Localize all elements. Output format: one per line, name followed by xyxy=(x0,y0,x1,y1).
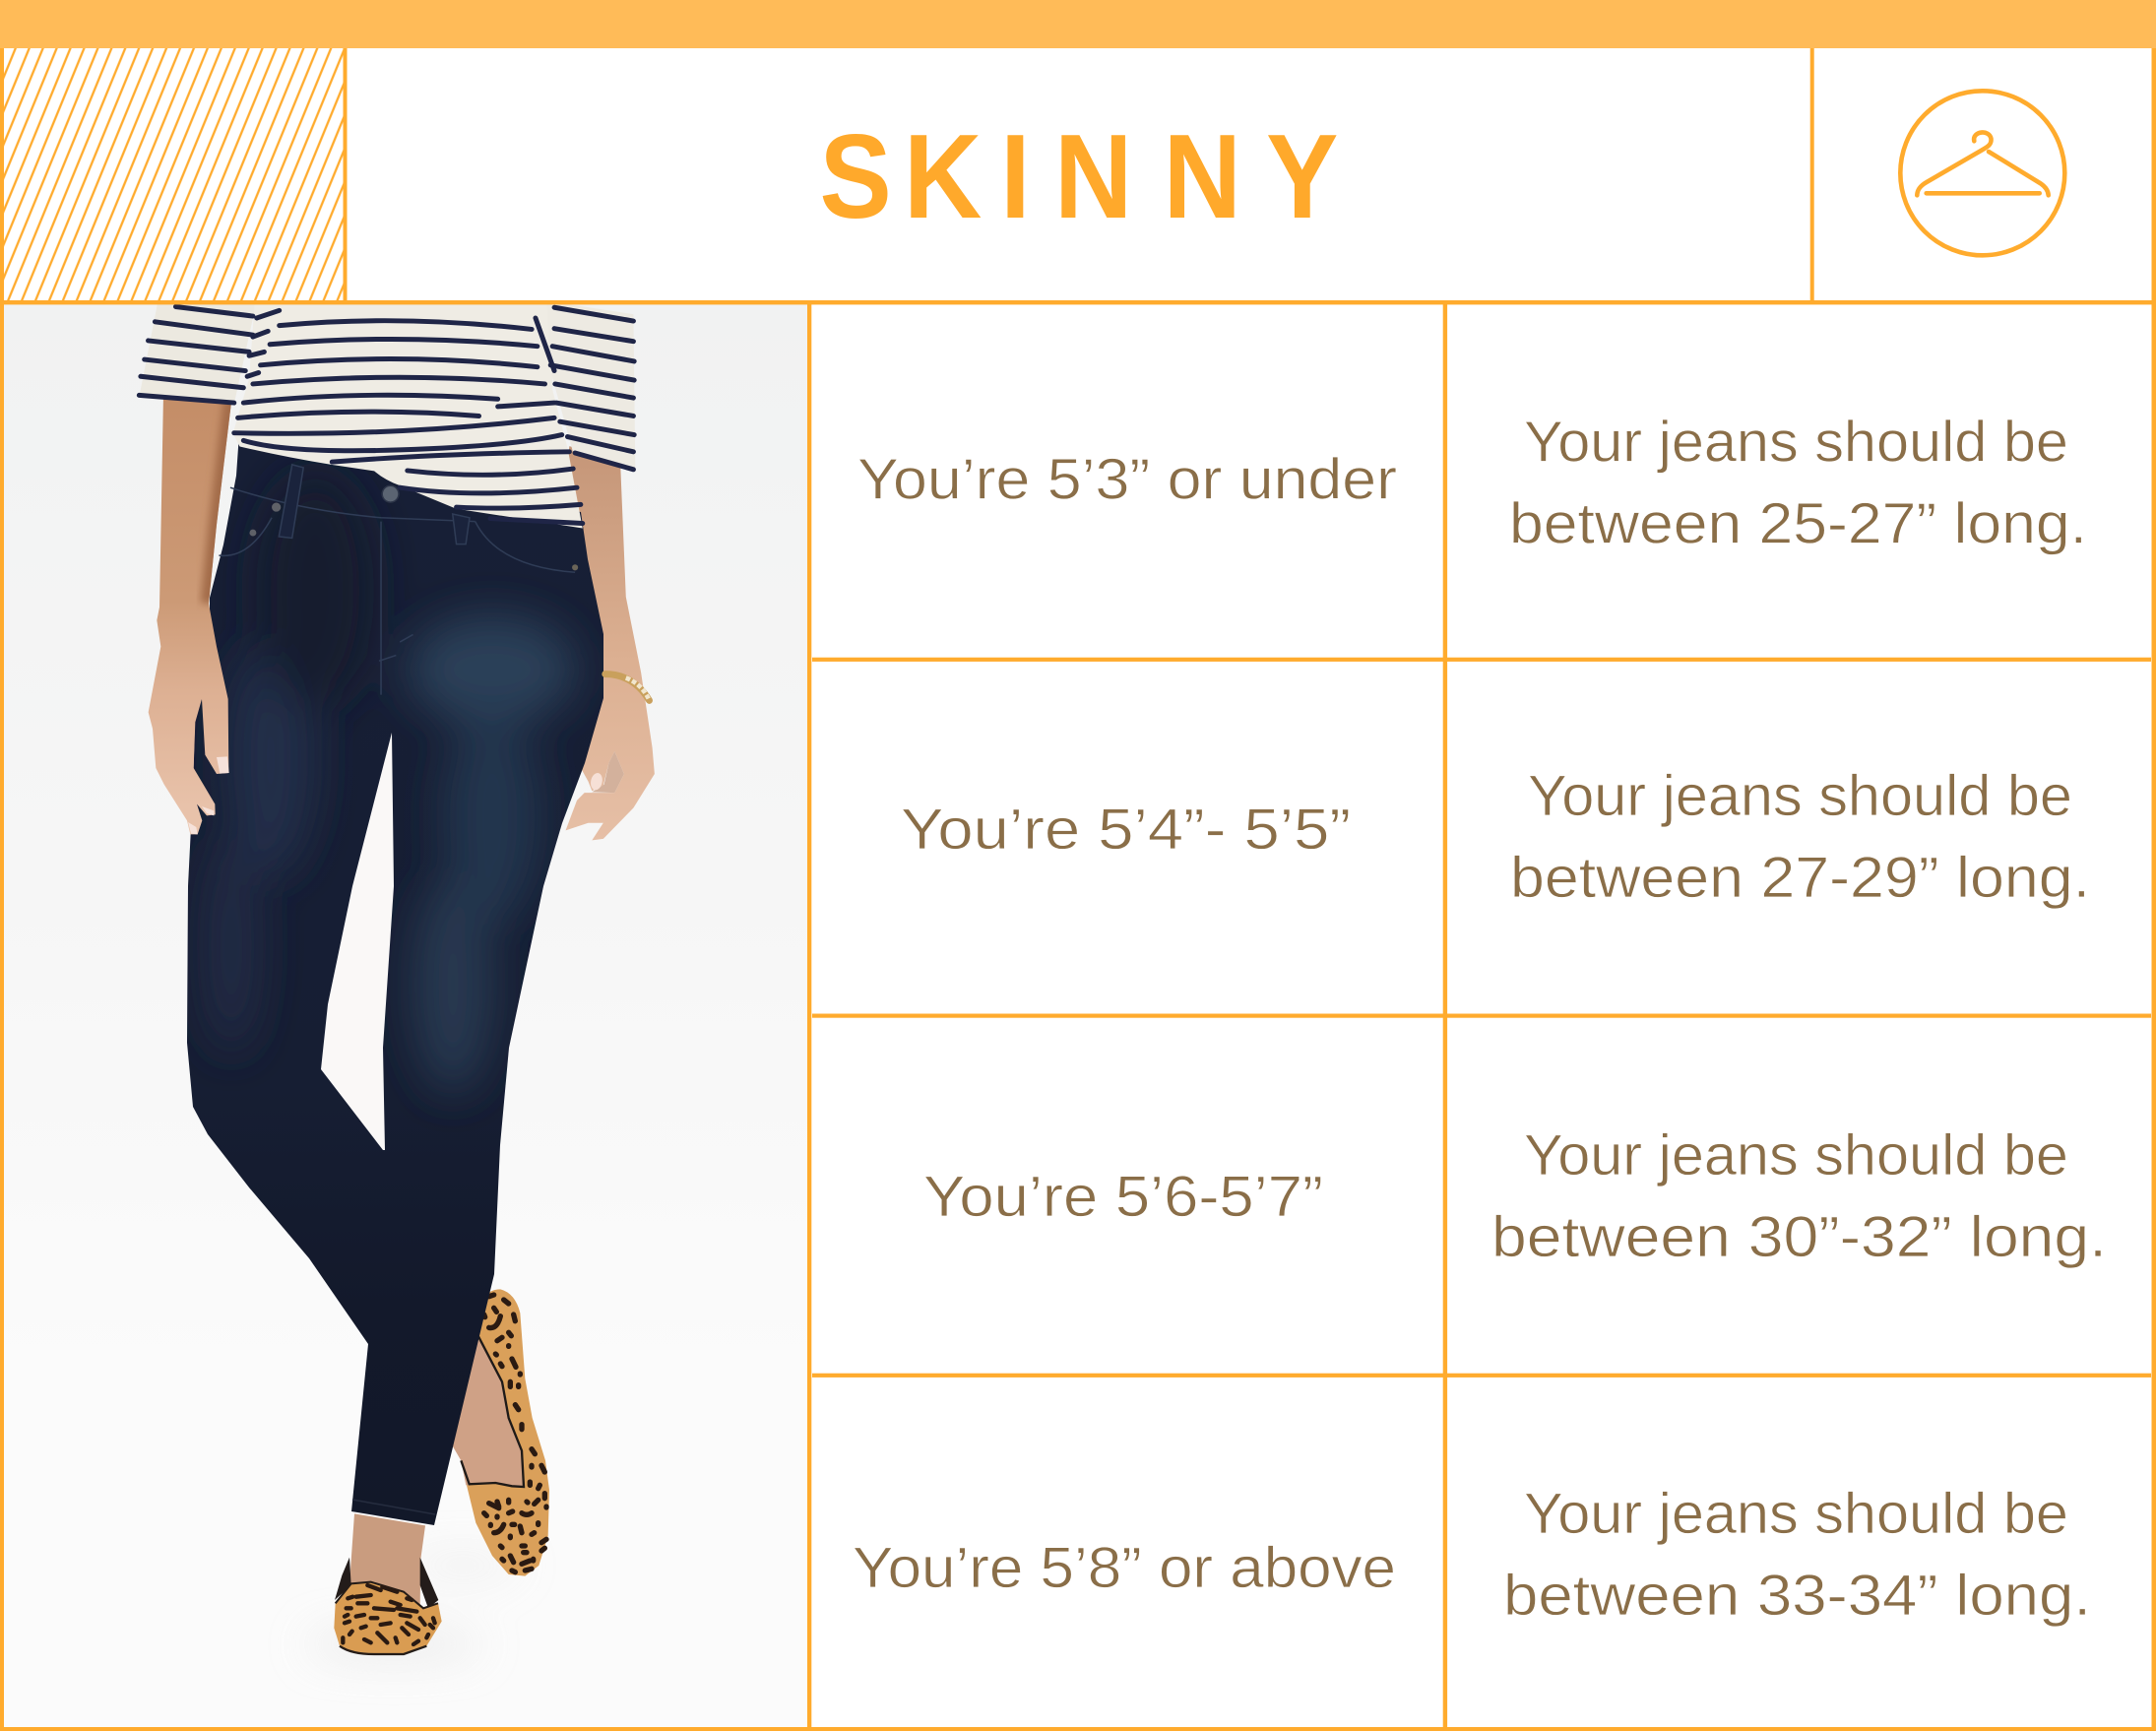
back shoe trim xyxy=(461,1336,524,1487)
row 4: height 5'8" or above xyxy=(853,1482,2091,1628)
striped shirt xyxy=(139,301,635,529)
row 2: height 5'4"-5'5" xyxy=(901,764,2090,910)
inseam recommendation: between 25-27” long. xyxy=(1509,492,2087,556)
top band xyxy=(0,0,2156,48)
row 3: height 5'6-5'7" xyxy=(923,1123,2107,1269)
inseam recommendation xyxy=(1491,1123,2107,1269)
floor shadows xyxy=(305,1558,522,1658)
front shoe and foot xyxy=(334,1513,442,1654)
front shoe sole xyxy=(340,1646,426,1654)
front shoe trim xyxy=(336,1582,438,1608)
photo: woman wearing skinny jeans xyxy=(4,301,807,1727)
fingernails xyxy=(188,756,229,834)
right arm and hand xyxy=(565,446,655,841)
icon: clothes hanger in circle xyxy=(1900,91,2064,255)
right sleeve xyxy=(546,301,635,472)
height label: You’re 5’3” or under xyxy=(857,447,1397,512)
front shoe leopard spots xyxy=(343,1585,435,1644)
title: SKINNY xyxy=(820,109,1338,243)
arm side shading xyxy=(209,394,232,604)
inseam recommendation: Your jeans should be xyxy=(1528,764,2072,828)
front shoe lining xyxy=(335,1558,438,1608)
back foot xyxy=(453,1339,523,1486)
jeans hem xyxy=(352,1500,435,1514)
gap between the legs xyxy=(321,733,394,1150)
left arm and hand xyxy=(149,394,232,834)
inseam recommendation xyxy=(1509,410,2087,556)
arm and hand shape xyxy=(149,394,232,834)
inseam recommendation: between 30”-32” long. xyxy=(1491,1205,2107,1269)
front shoe body xyxy=(334,1582,442,1654)
inseam recommendation: between 33-34” long. xyxy=(1503,1564,2091,1628)
inseam recommendation: Your jeans should be xyxy=(1524,1482,2068,1546)
denim highlights xyxy=(204,473,576,1093)
row 1: height 5'3" or under xyxy=(857,410,2087,556)
back shoe leopard spots xyxy=(484,1295,546,1572)
back shoe body xyxy=(467,1289,549,1576)
inseam recommendation: between 27-29” long. xyxy=(1510,846,2090,910)
shirt navy stripes xyxy=(139,306,634,524)
shirt body xyxy=(233,301,583,529)
height label: You’re 5’4”- 5’5” xyxy=(901,798,1351,862)
front foot xyxy=(349,1513,425,1607)
inseam recommendation: Your jeans should be xyxy=(1524,1123,2068,1187)
jeans xyxy=(187,433,603,1525)
right forearm xyxy=(565,446,655,841)
shaded palm between the fingers xyxy=(592,751,624,793)
inseam recommendation xyxy=(1510,764,2090,910)
bracelet xyxy=(605,674,650,700)
height label: You’re 5’8” or above xyxy=(853,1536,1396,1600)
inseam recommendation: Your jeans should be xyxy=(1524,410,2068,474)
left sleeve xyxy=(139,301,257,404)
waistband seams, loops and pockets xyxy=(219,465,578,695)
inseam recommendation xyxy=(1503,1482,2091,1628)
photo backdrop xyxy=(4,305,807,971)
height label: You’re 5’6-5’7” xyxy=(923,1165,1323,1229)
back shoe and foot xyxy=(450,1289,549,1576)
header hatch panel xyxy=(4,48,344,300)
right thumbnail xyxy=(591,773,602,790)
